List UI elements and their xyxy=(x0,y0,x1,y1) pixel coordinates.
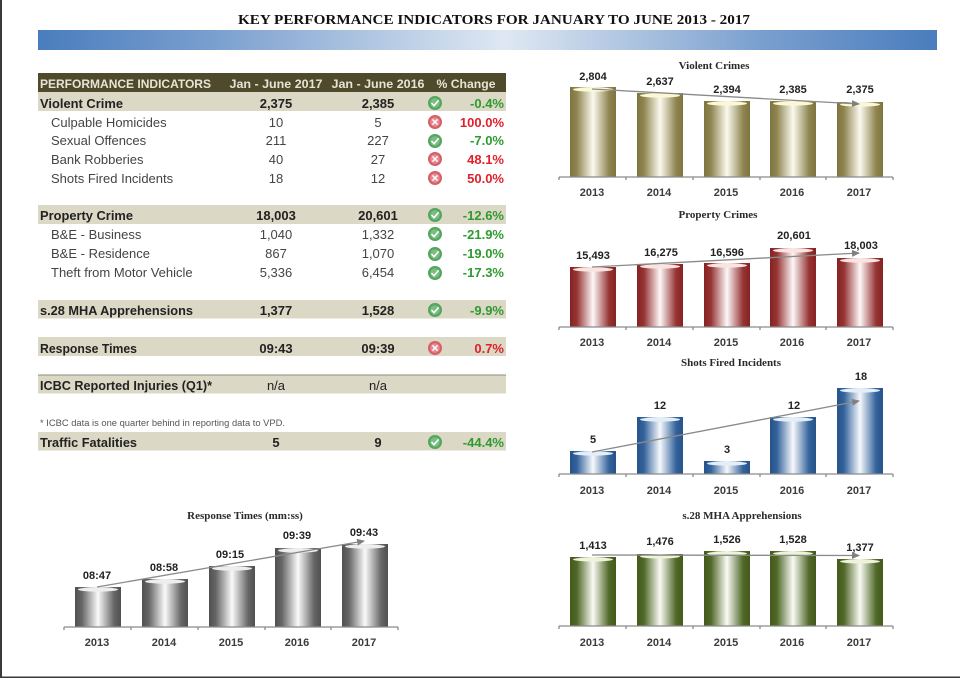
row: B&E - Business xyxy=(51,227,504,242)
chart: Response Times: 09:15 xyxy=(216,549,244,561)
chart: Violent Crimes: 2016 xyxy=(780,187,804,199)
chart: Shots Fired Incidents: 12 xyxy=(654,400,666,412)
row: Sexual Offences: 227 xyxy=(367,133,389,148)
row: B&E - Business: 1,040 xyxy=(260,227,292,242)
row: Violent Crime: Violent Crime xyxy=(40,96,123,111)
chart: Violent Crimes: 2,375 xyxy=(846,84,874,96)
chart: s.28 MHA Apprehensions: 1,526 xyxy=(713,534,741,546)
row: s.28 MHA Apprehensions: s.28 MHA Apprehensions xyxy=(40,303,193,318)
row: Theft from Motor Vehicle xyxy=(51,265,504,280)
row: Shots Fired Incidents: 18 xyxy=(269,171,283,186)
chart: Property Crimes: 2014 xyxy=(647,337,672,349)
chart: Violent Crimes: 2017 xyxy=(847,187,871,199)
row: Culpable Homicides: Culpable Homicides xyxy=(51,115,167,130)
row: Bank Robberies: Bank Robberies xyxy=(51,152,144,167)
chart: Violent Crimes: 2014 xyxy=(647,187,672,199)
chart: Response Times: 09:39 xyxy=(283,530,311,542)
chart: Response Times: Response Times (mm:ss) xyxy=(187,510,303,522)
chart: Property Crimes: 15,493 xyxy=(576,250,610,262)
row: ICBC Reported Injuries: n/a xyxy=(267,378,286,393)
row: Violent Crime: 2,375 xyxy=(260,96,292,111)
row: Property Crime xyxy=(38,205,506,224)
row: B&E - Residence: 1,070 xyxy=(362,246,394,261)
chart: Property Crimes: 2016 xyxy=(780,337,804,349)
row: Traffic Fatalities: -44.4% xyxy=(463,435,504,450)
chart: Violent Crimes xyxy=(559,60,893,199)
row: Traffic Fatalities: 5 xyxy=(272,435,280,450)
row: B&E - Business: 1,332 xyxy=(362,227,394,242)
row: Traffic Fatalities xyxy=(38,432,506,450)
row: B&E - Residence: 867 xyxy=(265,246,287,261)
row: Theft from Motor Vehicle: -17.3% xyxy=(463,265,504,280)
row: Theft from Motor Vehicle: 5,336 xyxy=(260,265,292,280)
chart: s.28 MHA Apprehensions xyxy=(559,510,893,649)
row: B&E - Residence: B&E - Residence xyxy=(51,246,150,261)
chart: Response Times: 08:58 xyxy=(150,562,178,574)
row: Theft from Motor Vehicle: Theft from Motor Vehicle xyxy=(51,265,193,280)
chart: Shots Fired Incidents: 2015 xyxy=(714,485,738,497)
row: Shots Fired Incidents xyxy=(51,171,504,186)
chart: Response Times: 2013 xyxy=(85,637,109,649)
chart: Violent Crimes: 2,637 xyxy=(646,76,674,88)
row: Sexual Offences: -7.0% xyxy=(470,133,504,148)
title: KEY PERFORMANCE INDICATORS FOR JANUARY TO JUNE 2013 - 2017 xyxy=(238,12,750,27)
row: Response Times: 09:43 xyxy=(259,341,293,356)
chart: Shots Fired Incidents: 2014 xyxy=(647,485,672,497)
row: Shots Fired Incidents: 50.0% xyxy=(467,171,504,186)
chart: s.28 MHA Apprehensions: 2013 xyxy=(580,637,604,649)
row: Shots Fired Incidents: 12 xyxy=(371,171,385,186)
row: B&E - Business: -21.9% xyxy=(463,227,504,242)
row: ICBC Reported Injuries: n/a xyxy=(369,378,388,393)
row: Response Times: 09:39 xyxy=(361,341,395,356)
chart: Shots Fired Incidents: 3 xyxy=(724,444,730,456)
row: s.28 MHA Apprehensions: 1,377 xyxy=(260,303,292,318)
row: Theft from Motor Vehicle: 6,454 xyxy=(362,265,394,280)
chart: Response Times: 2017 xyxy=(352,637,376,649)
row: Culpable Homicides: 10 xyxy=(269,115,283,130)
row: s.28 MHA Apprehensions xyxy=(38,300,506,318)
row: Sexual Offences: 211 xyxy=(266,133,286,148)
chart: Shots Fired Incidents: 18 xyxy=(855,371,867,383)
chart: Shots Fired Incidents xyxy=(559,357,893,497)
row: Culpable Homicides xyxy=(51,115,504,130)
row: s.28 MHA Apprehensions: -9.9% xyxy=(470,303,504,318)
table header row: Jan - June 2016 xyxy=(332,77,425,91)
row: Property Crime: 18,003 xyxy=(256,208,296,223)
chart: Shots Fired Incidents: 5 xyxy=(590,434,596,446)
chart: Shots Fired Incidents: 12 xyxy=(788,400,800,412)
chart: Response Times: 2016 xyxy=(285,637,309,649)
row: Bank Robberies: 27 xyxy=(371,152,385,167)
chart: s.28 MHA Apprehensions: 1,528 xyxy=(779,534,807,546)
row: Culpable Homicides: 100.0% xyxy=(460,115,504,130)
row: Response Times xyxy=(38,337,506,356)
chart: Response Times: 08:47 xyxy=(83,570,111,582)
chart: Violent Crimes: 2,385 xyxy=(779,84,807,96)
chart: Response Times: 2015 xyxy=(219,637,243,649)
chart: Violent Crimes: 2015 xyxy=(714,187,738,199)
chart: Shots Fired Incidents: 2016 xyxy=(780,485,804,497)
row: Traffic Fatalities: 9 xyxy=(374,435,382,450)
chart: s.28 MHA Apprehensions: 2016 xyxy=(780,637,804,649)
row: B&E - Business: B&E - Business xyxy=(51,227,142,242)
chart: s.28 MHA Apprehensions: 1,377 xyxy=(846,542,874,554)
row: Bank Robberies: 40 xyxy=(269,152,283,167)
row: ICBC Reported Injuries: ICBC Reported Injuries (Q1)* xyxy=(40,378,213,393)
row: Response Times: 0.7% xyxy=(474,341,504,356)
chart: Property Crimes: Property Crimes xyxy=(679,209,758,221)
chart: Property Crimes xyxy=(559,209,893,349)
row: B&E - Residence xyxy=(51,246,504,261)
chart: Response Times: 09:43 xyxy=(350,527,378,539)
row: s.28 MHA Apprehensions: 1,528 xyxy=(362,303,394,318)
chart: s.28 MHA Apprehensions: 1,476 xyxy=(646,536,674,548)
row: Traffic Fatalities: Traffic Fatalities xyxy=(40,435,137,450)
chart: Property Crimes: 2017 xyxy=(847,337,871,349)
table header row xyxy=(38,73,506,92)
chart: Response Times xyxy=(64,510,398,649)
footnote: * ICBC data is one quarter behind in reporting data to VPD. xyxy=(40,418,285,428)
row: Shots Fired Incidents: Shots Fired Incidents xyxy=(51,171,174,186)
chart: Property Crimes: 20,601 xyxy=(777,230,811,242)
row: Violent Crime xyxy=(38,92,506,111)
row: Sexual Offences xyxy=(51,133,504,148)
row: Bank Robberies: 48.1% xyxy=(467,152,504,167)
chart: s.28 MHA Apprehensions: 2014 xyxy=(647,637,672,649)
chart: Property Crimes: 18,003 xyxy=(844,240,878,252)
chart: s.28 MHA Apprehensions: 1,413 xyxy=(579,540,607,552)
chart: Property Crimes: 2013 xyxy=(580,337,604,349)
table header row: Jan - June 2017 xyxy=(230,77,323,91)
chart: Violent Crimes: 2,394 xyxy=(713,84,742,96)
chart: Shots Fired Incidents: 2013 xyxy=(580,485,604,497)
row: B&E - Residence: -19.0% xyxy=(463,246,504,261)
row: ICBC Reported Injuries xyxy=(38,374,506,394)
chart: Shots Fired Incidents: 2017 xyxy=(847,485,871,497)
row: Property Crime: -12.6% xyxy=(463,208,504,223)
chart: Violent Crimes: 2,804 xyxy=(579,71,608,83)
row: Sexual Offences: Sexual Offences xyxy=(51,133,147,148)
chart: Violent Crimes: 2013 xyxy=(580,187,604,199)
chart: Property Crimes: 16,275 xyxy=(644,247,678,259)
chart: Violent Crimes: Violent Crimes xyxy=(679,60,750,72)
chart: s.28 MHA Apprehensions: s.28 MHA Apprehensions xyxy=(682,510,802,522)
chart: Property Crimes: 16,596 xyxy=(710,247,744,259)
row: Violent Crime: 2,385 xyxy=(362,96,394,111)
chart: Response Times: 2014 xyxy=(152,637,177,649)
row: Property Crime: 20,601 xyxy=(358,208,398,223)
row: Violent Crime: -0.4% xyxy=(470,96,504,111)
chart: s.28 MHA Apprehensions: 2015 xyxy=(714,637,738,649)
table header row: PERFORMANCE INDICATORS xyxy=(40,77,211,91)
panel: performance indicators table xyxy=(38,73,506,450)
row: Culpable Homicides: 5 xyxy=(374,115,382,130)
chart: Shots Fired Incidents: Shots Fired Incidents xyxy=(681,357,782,369)
table header row: % Change xyxy=(436,77,496,91)
row: Response Times: Response Times xyxy=(40,341,137,356)
chart: Property Crimes: 2015 xyxy=(714,337,738,349)
row: Property Crime: Property Crime xyxy=(40,208,133,223)
chart: s.28 MHA Apprehensions: 2017 xyxy=(847,637,871,649)
row: Bank Robberies xyxy=(51,152,504,167)
blue header bar xyxy=(38,30,937,50)
